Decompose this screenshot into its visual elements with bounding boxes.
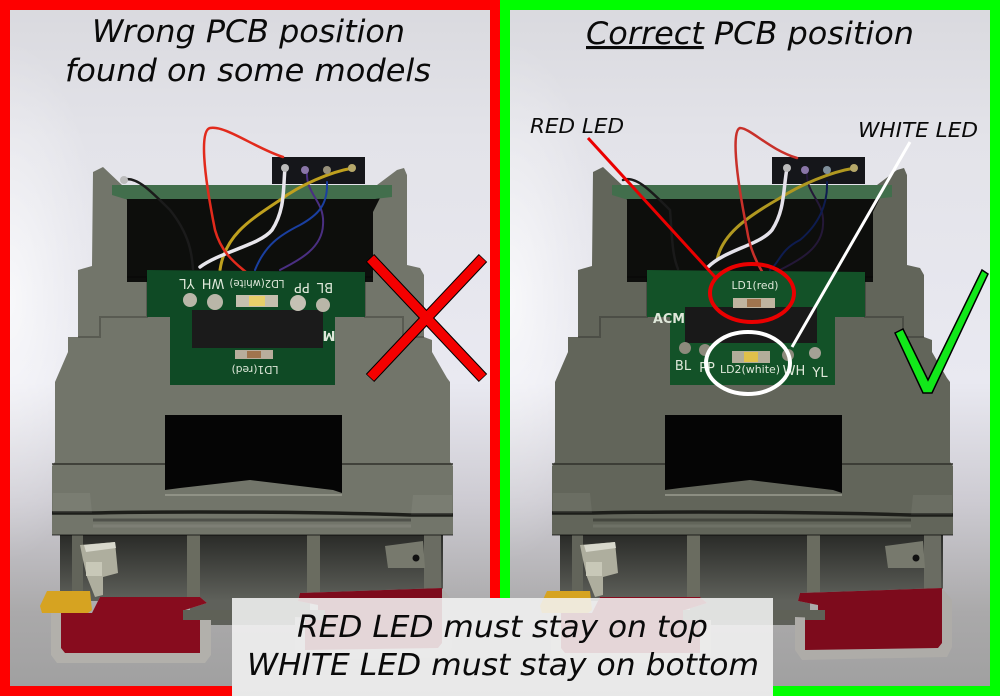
PCB wrong orientation: LD1(red) <box>232 363 278 376</box>
PCB correct orientation <box>647 270 865 385</box>
PCB correct orientation: LD2(white) <box>720 363 780 376</box>
heading: wrong position: Wrong PCB position <box>92 14 405 50</box>
photo background right <box>500 0 1000 696</box>
PCB correct orientation: ACM <box>653 312 685 327</box>
caption box: WHITE LED must stay on bottom <box>247 648 759 683</box>
panel: correct PCB position <box>500 0 1000 696</box>
wires right <box>623 128 858 273</box>
photo background left <box>0 0 500 696</box>
PCB wrong orientation: BL <box>316 279 333 294</box>
truck right <box>540 157 953 663</box>
PCB correct orientation: WH <box>783 364 805 379</box>
wires left <box>120 128 356 273</box>
callout: white LED arrow and circle <box>706 142 910 394</box>
PCB wrong orientation: WH <box>202 275 224 290</box>
PCB wrong orientation: M <box>323 327 335 342</box>
heading: wrong position: found on some models <box>65 53 431 89</box>
truck left <box>40 157 453 663</box>
callout: red LED arrow and circle <box>588 138 794 322</box>
PCB wrong orientation: PP <box>294 279 310 294</box>
label: white LED: WHITE LED <box>858 118 978 142</box>
panel: wrong PCB position <box>0 0 500 696</box>
heading: wrong position <box>65 14 431 89</box>
frame: green border <box>500 0 1000 696</box>
PCB correct orientation: PP <box>699 361 715 376</box>
PCB wrong orientation <box>147 270 365 385</box>
caption box <box>232 598 773 696</box>
icon: green check mark <box>895 270 988 393</box>
heading: correct position: Correct PCB position <box>586 16 914 52</box>
PCB correct orientation: YL <box>811 366 828 381</box>
PCB wrong orientation: LD2(white) <box>230 277 284 290</box>
frame: red border <box>0 0 500 696</box>
PCB wrong orientation: YL <box>179 275 196 290</box>
icon: red cross <box>370 258 483 378</box>
label: red LED: RED LED <box>530 114 624 138</box>
caption box: RED LED must stay on top <box>297 610 708 645</box>
PCB correct orientation: LD1(red) <box>732 279 778 292</box>
PCB correct orientation: BL <box>675 359 692 374</box>
